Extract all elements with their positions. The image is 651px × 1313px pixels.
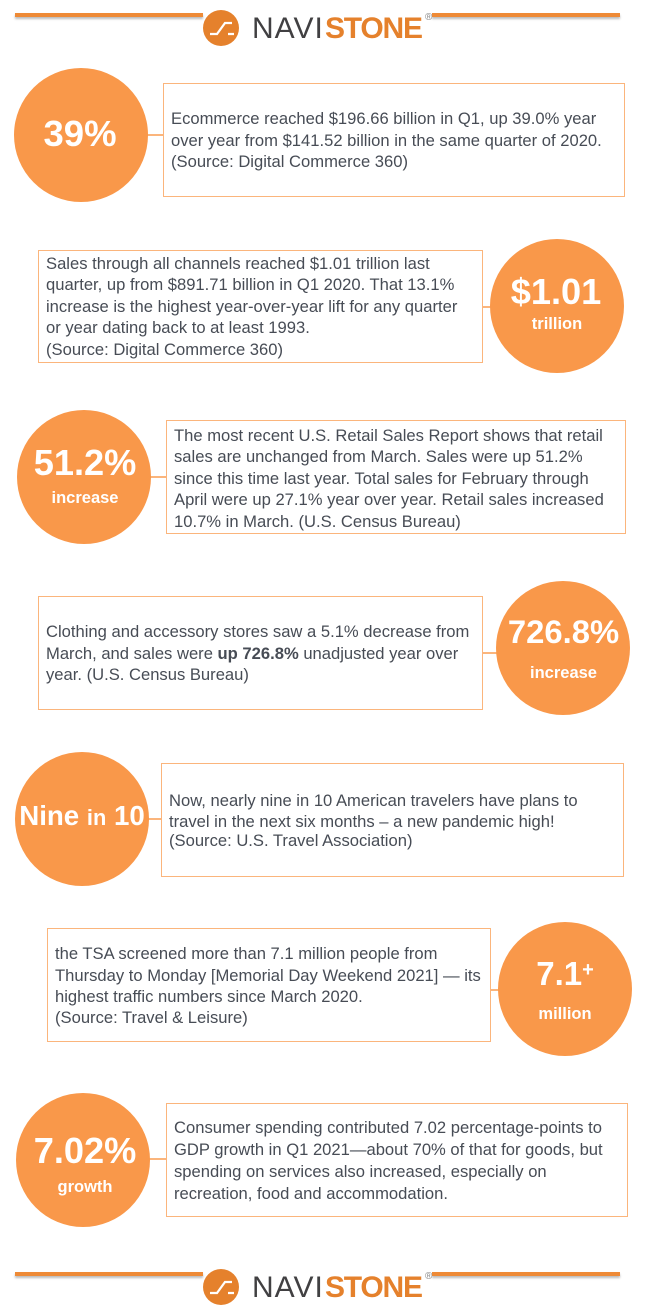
header logo (14, 10, 621, 46)
text box: ecommerce: Ecommerce reached $196.66 billion in Q1, up 39.0% year (171, 109, 596, 128)
circle: $1.01 trillion: trillion (532, 315, 582, 333)
text box: ecommerce: over year from $141.52 billion in the same quarter of 2020. (171, 131, 602, 150)
text box: retail sales: since this time last year. Total sales for February through (174, 469, 589, 488)
stat row 3: 51.2% increase (17, 410, 626, 544)
text box: travelers: travel in the next six months – a new pandemic high! (169, 812, 555, 831)
text box: clothing: March, and sales were up 726.8% unadjusted year over (46, 644, 458, 663)
footer registered mark: ® (425, 1271, 432, 1282)
stat row 7: 7.02% growth (16, 1093, 628, 1227)
text box: all channels: increase is the highest year-over-year lift for any quarter (46, 297, 457, 316)
icon: logo stair mark (203, 10, 239, 46)
text box: all channels: or year dating back to at least 1993. (46, 318, 310, 337)
circle: 726.8% increase: 726.8% (508, 613, 619, 650)
text box: all channels: (Source: Digital Commerce 360) (46, 340, 283, 359)
circle: 726.8% increase (496, 581, 630, 715)
text box: retail sales: The most recent U.S. Retail Sales Report shows that retail (174, 426, 603, 445)
circle: 39% (14, 68, 148, 202)
text box: travelers: (Source: U.S. Travel Association) (169, 831, 412, 850)
circle: 7.02% growth: 7.02% (34, 1130, 136, 1171)
circle: 7.02% growth (16, 1093, 150, 1227)
text box: retail sales: sales are unchanged from March. Sales were up 51.2% (174, 447, 583, 466)
circle: $1.01 trillion: $1.01 (511, 271, 601, 312)
text box: retail sales (166, 420, 626, 534)
text box: retail sales: April were up 27.1% year over year. Retail sales increased (174, 490, 604, 509)
footer logo (14, 1269, 621, 1305)
stat row 5: nine in 10 (15, 752, 624, 886)
registered mark: ® (425, 12, 432, 23)
circle: 726.8% increase: increase (530, 664, 597, 682)
stat row 4: 726.8% increase (38, 581, 630, 715)
circle: $1.01 trillion (490, 239, 624, 373)
circle: 51.2% increase: increase (52, 489, 118, 507)
stat row 1: 39% (14, 68, 625, 202)
text box: travelers: Now, nearly nine in 10 American travelers have plans to (169, 791, 578, 810)
text box: retail sales: 10.7% in March. (U.S. Census Bureau) (174, 512, 461, 531)
text box: clothing (38, 596, 483, 710)
text box: all channels (38, 250, 483, 363)
circle: nine in 10: Nine in 10 (19, 800, 145, 831)
circle: 7.1+ million: million (538, 1005, 592, 1023)
text box: ecommerce (163, 83, 625, 197)
text box: TSA: highest traffic numbers since March 2020. (55, 987, 363, 1006)
circle: 7.02% growth: growth (58, 1178, 112, 1196)
text box: clothing: Clothing and accessory stores saw a 5.1% decrease from (46, 622, 469, 641)
text box: clothing: year. (U.S. Census Bureau) (46, 665, 249, 684)
text box: consumer spending: GDP growth in Q1 2021—about 70% of that for goods, but (174, 1140, 603, 1159)
stat row 2: $1.01 trillion (38, 239, 624, 373)
text box: TSA: the TSA screened more than 7.1 million people from (55, 944, 437, 963)
text box: TSA (47, 928, 491, 1042)
text box: all channels: quarter, up from $891.71 billion in Q1 2020. That 13.1% (46, 275, 454, 294)
logo wordmark accent: STONE (325, 12, 422, 44)
text box: consumer spending: spending on services also increased, especially on (174, 1162, 547, 1181)
circle: 7.1+ million (498, 922, 632, 1056)
text box: consumer spending: Consumer spending contributed 7.02 percentage-points to (174, 1118, 602, 1137)
text box: all channels: Sales through all channels reached $1.01 trillion last (46, 254, 430, 273)
text box: TSA: (Source: Travel & Leisure) (55, 1008, 248, 1027)
text box: consumer spending: recreation, food and accommodation. (174, 1184, 448, 1203)
footer logo wordmark: NAVI (252, 1270, 324, 1304)
text box: TSA: Thursday to Monday [Memorial Day Weekend 2021] — its (55, 966, 481, 985)
icon: footer logo stair mark (203, 1269, 239, 1305)
circle: 39%: 39% (43, 113, 117, 154)
text box: ecommerce: (Source: Digital Commerce 360) (171, 152, 408, 171)
stat row 6: 7.1+ million (47, 922, 632, 1056)
circle: 7.1+ million: 7.1+ (536, 955, 594, 992)
circle: nine in 10 (15, 752, 149, 886)
text box: consumer spending (166, 1103, 628, 1217)
circle: 51.2% increase (17, 410, 151, 544)
logo wordmark: NAVI (252, 12, 324, 44)
text box: travelers (161, 763, 624, 877)
footer logo wordmark accent: STONE (325, 1270, 422, 1304)
circle: 51.2% increase: 51.2% (34, 442, 136, 483)
